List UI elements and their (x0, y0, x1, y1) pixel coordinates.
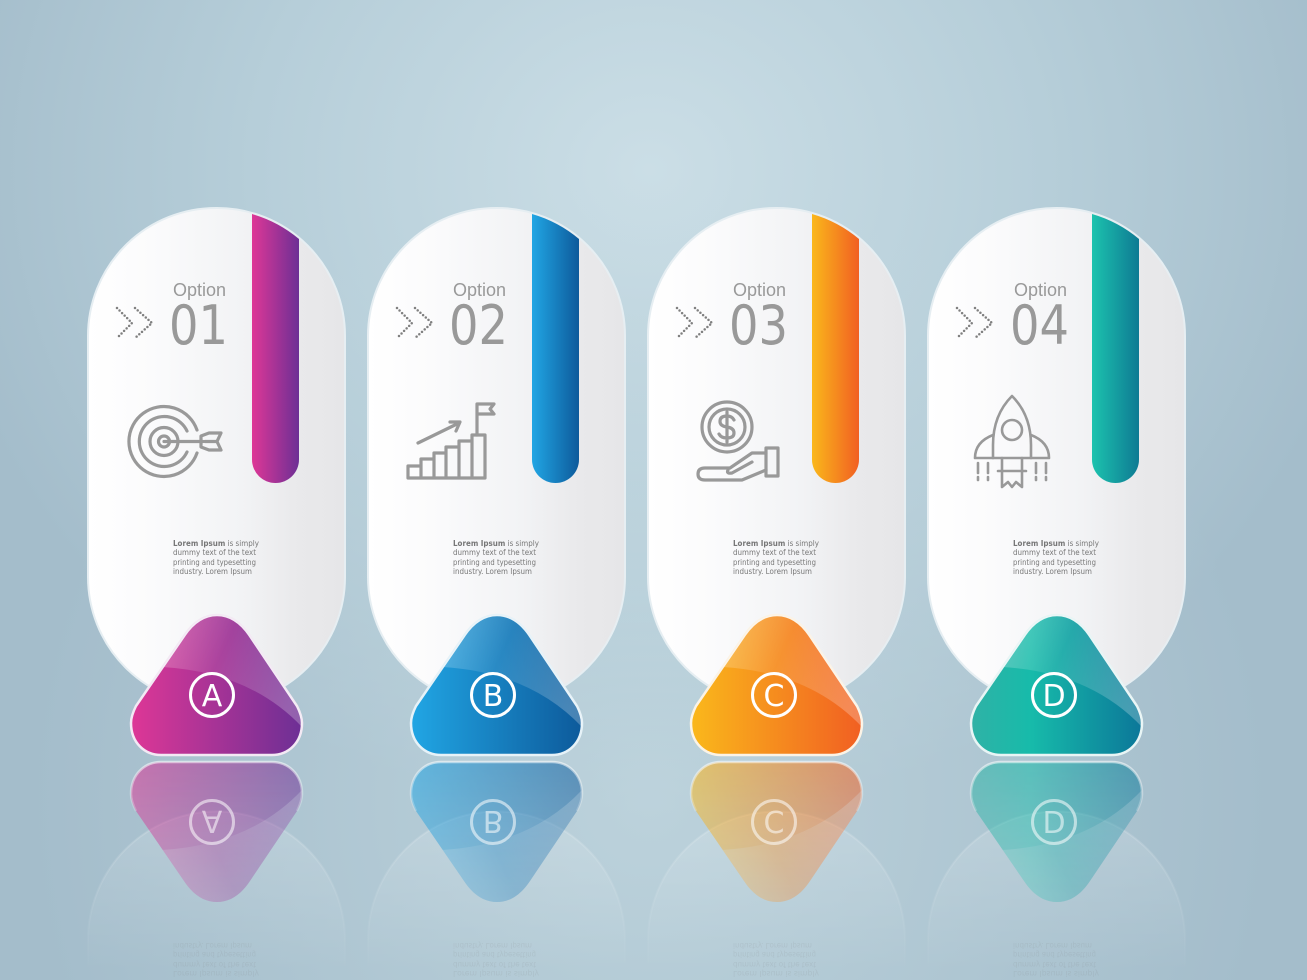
badge D: D (1042, 679, 1066, 714)
panel: option 04 (928, 208, 1185, 755)
badge B (411, 615, 582, 755)
badge D (971, 615, 1142, 755)
description (173, 539, 259, 576)
badge C: C (764, 679, 784, 714)
badge A (131, 615, 302, 755)
reflection: option D: printing and typesetting (1013, 950, 1096, 959)
chevrons (397, 308, 432, 338)
reflection: option A: industry. Lorem Ipsum (173, 941, 252, 950)
reflection: option B: printing and typesetting (453, 950, 536, 959)
reflection: option C: C (764, 803, 784, 838)
reflection: option C: Lorem Ipsum is simply (733, 969, 819, 978)
reflection: option A: dummy text of the text (173, 960, 256, 969)
description: industry. Lorem Ipsum (173, 567, 252, 576)
reflection: option B: dummy text of the text (453, 960, 536, 969)
badge A: A (202, 679, 223, 714)
accent bar (532, 214, 579, 483)
description: Lorem Ipsum is simply (1013, 539, 1099, 548)
card body (368, 208, 625, 705)
panel: option 02 (368, 208, 625, 755)
reflection: option B: B (483, 803, 503, 838)
accent bar (252, 214, 299, 483)
reflection: option A: Lorem Ipsum is simply (173, 969, 259, 978)
reflection: option D: industry. Lorem Ipsum (1013, 941, 1092, 950)
description: Lorem Ipsum is simply (173, 539, 259, 548)
icon: growth chart with flag (408, 404, 494, 478)
badge C (691, 615, 862, 755)
reflection: option C: printing and typesetting (733, 950, 816, 959)
heading: 01 (169, 294, 228, 357)
description (1013, 539, 1099, 576)
reflection: option A (88, 762, 345, 978)
heading: 03 (729, 294, 788, 357)
panel: option 03 (648, 208, 905, 755)
card body (928, 208, 1185, 705)
description: dummy text of the text (173, 548, 256, 557)
chevrons (117, 308, 152, 338)
chevrons (677, 308, 712, 338)
description: printing and typesetting (733, 558, 816, 567)
heading: 02 (449, 294, 508, 357)
description: dummy text of the text (1013, 548, 1096, 557)
heading: 04 (1010, 294, 1069, 357)
description: industry. Lorem Ipsum (1013, 567, 1092, 576)
reflection: option D: Lorem Ipsum is simply (1013, 969, 1099, 978)
reflection: option D: dummy text of the text (1013, 960, 1096, 969)
reflection: option D: D (1042, 803, 1066, 838)
icon: rocket (975, 396, 1049, 487)
icon: coin in hand (698, 402, 778, 480)
badge B: B (483, 679, 503, 714)
reflection: option D (928, 762, 1185, 978)
reflection: option B: Lorem Ipsum is simply (453, 969, 539, 978)
reflection: option A: printing and typesetting (173, 950, 256, 959)
description (453, 539, 539, 576)
heading: Option (1014, 280, 1067, 300)
heading: Option (733, 280, 786, 300)
reflection: option C: dummy text of the text (733, 960, 816, 969)
description: Lorem Ipsum is simply (453, 539, 539, 548)
reflection: option C: industry. Lorem Ipsum (733, 941, 812, 950)
description: dummy text of the text (453, 548, 536, 557)
description: dummy text of the text (733, 548, 816, 557)
description: industry. Lorem Ipsum (453, 567, 532, 576)
card body (88, 208, 345, 705)
description (733, 539, 819, 576)
card body (648, 208, 905, 705)
reflection: option B (368, 762, 625, 978)
description: printing and typesetting (173, 558, 256, 567)
accent bar (1092, 214, 1139, 483)
accent bar (812, 214, 859, 483)
description: industry. Lorem Ipsum (733, 567, 812, 576)
description: Lorem Ipsum is simply (733, 539, 819, 548)
heading: Option (453, 280, 506, 300)
heading: Option (173, 280, 226, 300)
reflection: option B: industry. Lorem Ipsum (453, 941, 532, 950)
icon: target (129, 406, 221, 476)
panel: option 01 (88, 208, 345, 755)
chevrons (957, 308, 992, 338)
reflection: option A: A (202, 803, 223, 838)
description: printing and typesetting (453, 558, 536, 567)
description: printing and typesetting (1013, 558, 1096, 567)
reflection: option C (648, 762, 905, 978)
